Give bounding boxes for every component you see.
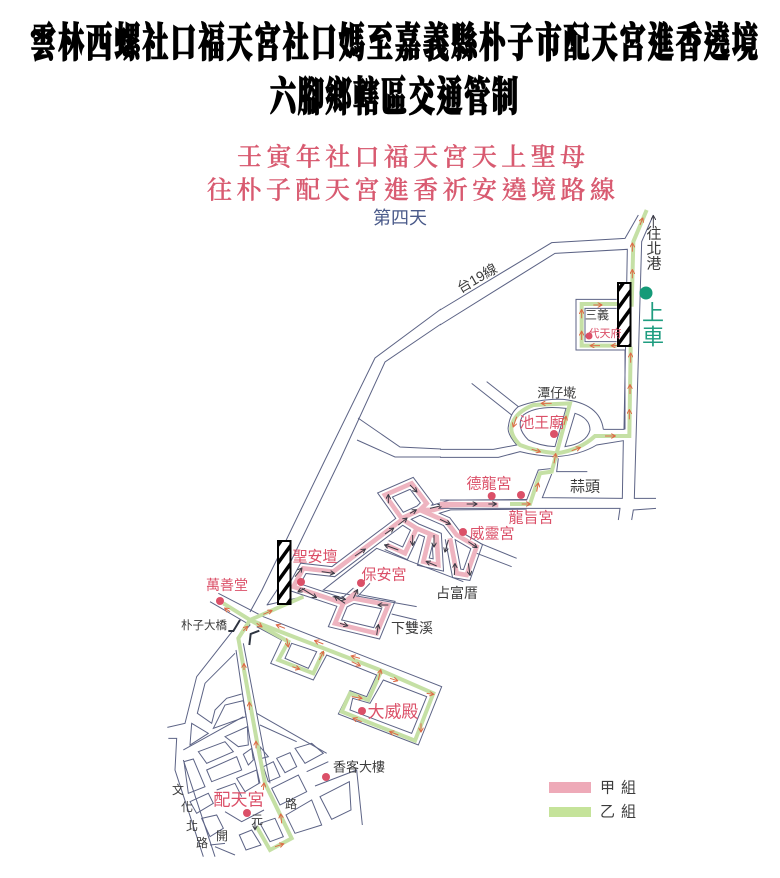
direction label: towards Beigang: 港 [646, 256, 662, 272]
place labels [181, 307, 622, 810]
street labels: Wenhua North Road and Kaiyuan Road: 路 [285, 796, 297, 811]
boarding point: green dot and label: 上 [642, 300, 664, 326]
map heading: 第四天 [373, 208, 427, 228]
street labels: Wenhua North Road and Kaiyuan Road [172, 782, 297, 850]
map: central district, group A route [293, 483, 527, 635]
title: 六腳鄉轄區交通管制 [270, 74, 518, 120]
street labels: Wenhua North Road and Kaiyuan Road: 北 [186, 819, 198, 833]
bridge marks [228, 620, 259, 645]
place labels: 占富厝 [436, 585, 478, 601]
place labels: 蒜頭 [570, 478, 600, 496]
place labels: 聖安壇 [292, 548, 338, 566]
map heading: 壬寅年社口福天宮天上聖母 [237, 144, 585, 172]
street labels: Wenhua North Road and Kaiyuan Road: 開 [216, 829, 228, 843]
place labels: 威靈宮 [469, 526, 515, 542]
title [30, 20, 758, 120]
street labels: Wenhua North Road and Kaiyuan Road: 文 [172, 782, 184, 797]
legend [549, 780, 636, 820]
map: north-east district [440, 210, 656, 520]
place labels: 香客大樓 [333, 760, 385, 774]
direction label: towards Beigang: 北 [646, 240, 662, 258]
road name: Provincial Highway 19: 台19線 [454, 260, 500, 296]
street labels: Wenhua North Road and Kaiyuan Road: 路 [196, 835, 208, 850]
place labels: 池王廟 [519, 414, 564, 432]
boarding point: green dot and label: 車 [642, 324, 664, 350]
direction label: towards Beigang [646, 226, 662, 272]
place labels: 配天宮 [214, 790, 264, 810]
place labels: 德龍宮 [466, 474, 512, 492]
district roads and blocks [167, 593, 442, 857]
legend: 乙組 [600, 804, 636, 820]
place labels: 代天府 [588, 326, 622, 340]
title: 雲林西螺社口福天宮社口媽至嘉義縣朴子市配天宮進香遶境 [30, 20, 758, 66]
temple markers [216, 332, 592, 817]
green route, group B [223, 597, 433, 850]
road: Provincial Highway 19 south-west section and side roads [250, 309, 441, 612]
boarding point: green dot and label [640, 286, 664, 350]
route arrows [225, 608, 433, 847]
road casing [293, 483, 527, 633]
place labels: 龍旨宮 [508, 510, 554, 526]
pink route, group A [293, 483, 497, 633]
map heading: 往朴子配天宮進香祈安遶境路線 [207, 176, 615, 204]
place labels: 潭仔墘 [537, 386, 576, 400]
pink route end [440, 497, 498, 512]
place labels: 下雙溪 [391, 620, 433, 636]
roads [440, 215, 656, 520]
direction label: towards Beigang: 往 [646, 226, 662, 242]
green route, group B [510, 210, 647, 504]
place labels: 朴子大橋 [181, 618, 227, 632]
street labels: Wenhua North Road and Kaiyuan Road: 化 [181, 800, 193, 814]
street labels: Wenhua North Road and Kaiyuan Road: 元 [251, 813, 263, 827]
route arrows [467, 216, 653, 504]
map: south-west district, Puzi [167, 593, 442, 857]
traffic control barrier: south [278, 541, 290, 604]
legend: 甲組 [600, 780, 636, 796]
place labels: 萬善堂 [206, 577, 248, 593]
place labels: 保安宮 [361, 566, 407, 584]
traffic control barrier: north [618, 283, 630, 346]
place labels: 三義 [585, 307, 609, 322]
black arrows [295, 485, 497, 635]
map heading [207, 144, 615, 228]
place labels: 大威殿 [368, 702, 418, 722]
